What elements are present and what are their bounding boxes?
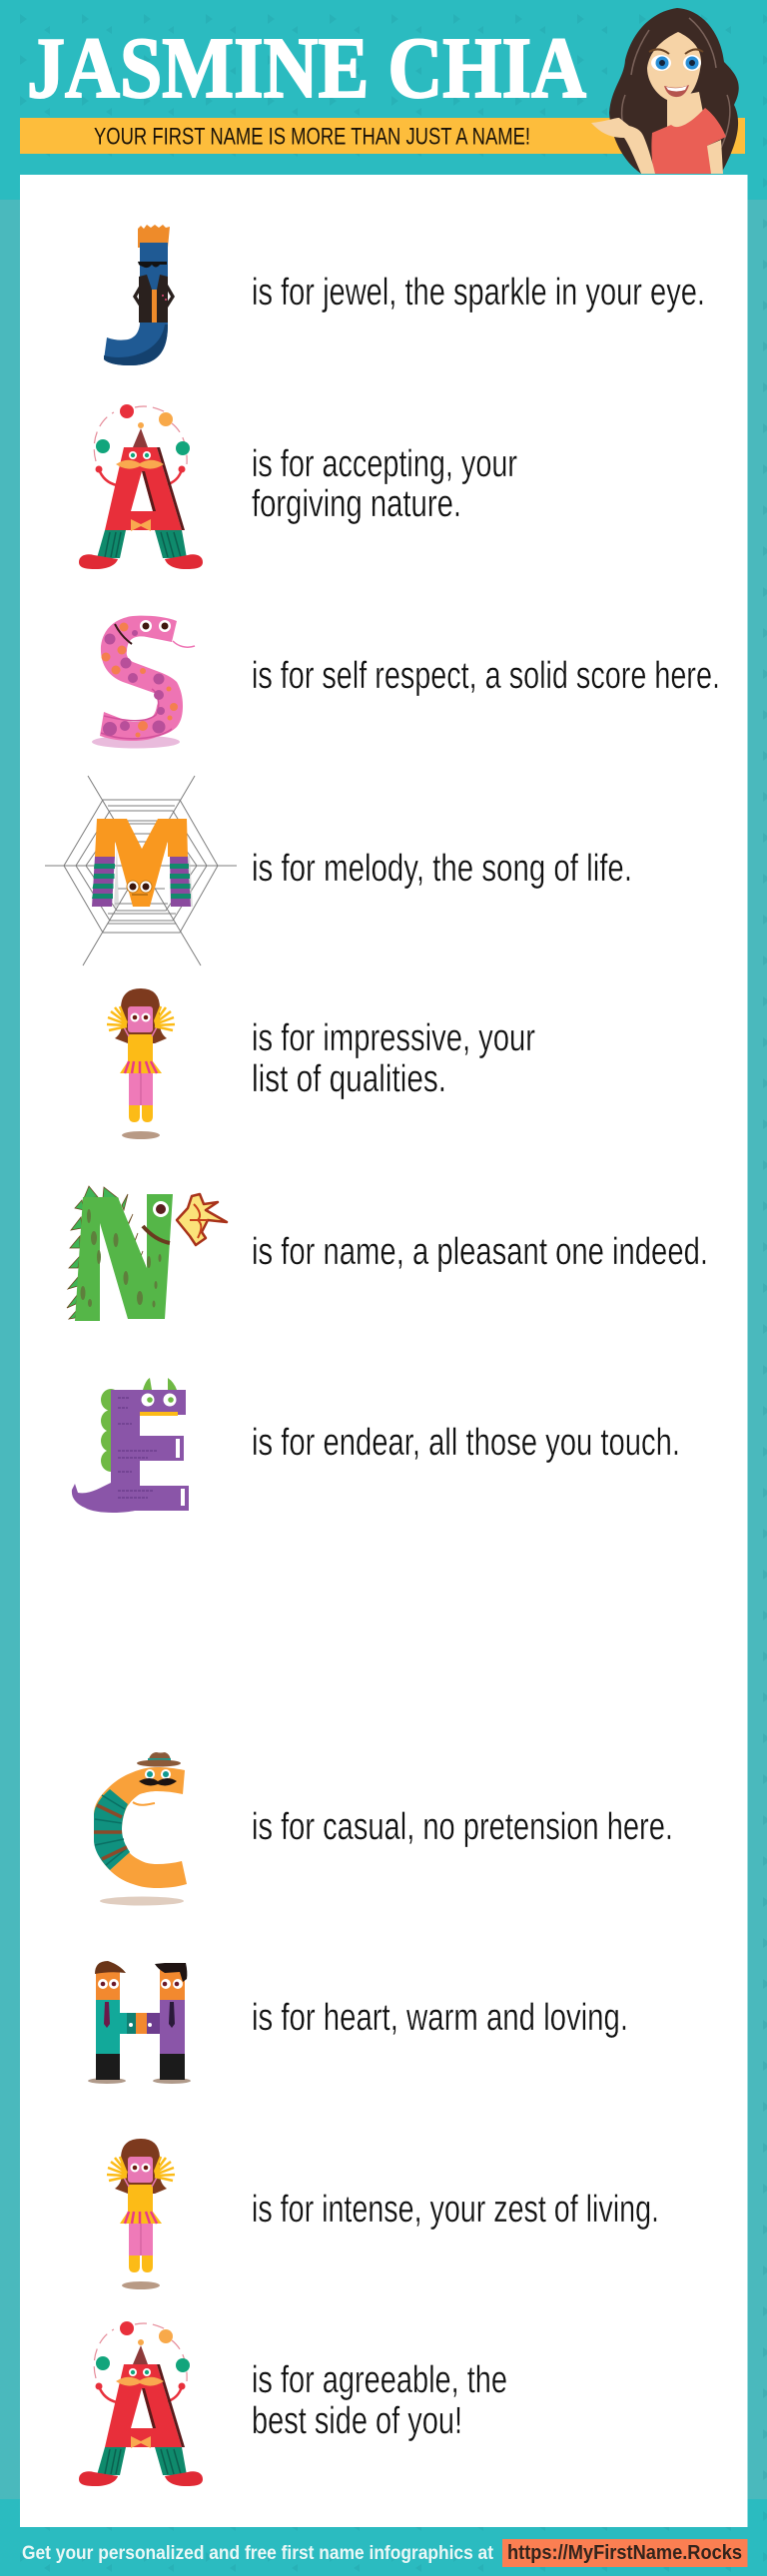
- letter A: clown juggler: [79, 404, 203, 569]
- letter J: blue punk: [104, 225, 175, 365]
- letter E: purple dinosaur: [72, 1378, 189, 1513]
- subtitle banner: YOUR FIRST NAME IS MORE THAN JUST A NAME!: [94, 124, 530, 150]
- text: M: is for melody, the song of life.: [252, 848, 632, 890]
- text: I impressive: list of qualities.: [252, 1058, 446, 1100]
- letter A: clown juggler repeat: [79, 2321, 203, 2486]
- text: A accepting: is for accepting, your: [252, 443, 517, 485]
- text: H: is for heart, warm and loving.: [252, 1997, 628, 2039]
- text: A accepting: [252, 443, 517, 525]
- text: A accepting: forgiving nature.: [252, 483, 461, 525]
- letter I: cheerleader repeat: [107, 2139, 175, 2289]
- footer text: Get your personalized and free first name infographics at: [22, 2542, 493, 2564]
- text: A agreeable: best side of you!: [252, 2400, 462, 2442]
- text: I impressive: [252, 1017, 535, 1100]
- letter H: two businessmen: [88, 1961, 191, 2084]
- text: I impressive: is for impressive, your: [252, 1017, 535, 1059]
- footer link badge: https://MyFirstName.Rocks: [507, 2542, 742, 2564]
- text: A agreeable: [252, 2359, 507, 2442]
- title: JASMINE CHIA: [27, 19, 586, 116]
- letter I: cheerleader: [107, 988, 175, 1139]
- text: A agreeable: is for agreeable, the: [252, 2359, 507, 2401]
- subtitle banner: [20, 118, 745, 154]
- letter M: spider web: [45, 776, 237, 966]
- letter S: pink snake: [92, 616, 195, 749]
- illustration: presenter woman: [591, 8, 739, 174]
- letter N: green dragon: [67, 1186, 227, 1321]
- letter C: mustached sombrero: [94, 1752, 187, 1905]
